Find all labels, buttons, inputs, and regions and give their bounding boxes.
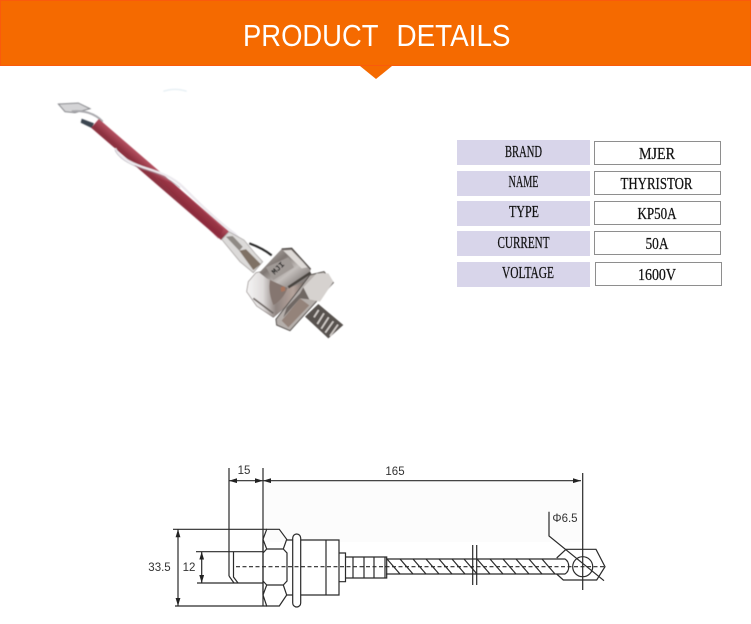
row: voltage: VOLTAGE: [502, 263, 554, 282]
hex nut: [276, 272, 333, 331]
stud thread: [229, 552, 238, 583]
break lines: [473, 545, 477, 585]
title: PRODUCT: [243, 19, 378, 53]
row: voltage: 1600V: [638, 265, 677, 284]
lug hole: [573, 557, 593, 577]
terminal lug: [58, 103, 90, 113]
faint reflection: [163, 89, 187, 91]
thread: [305, 304, 343, 338]
black wire: [249, 243, 272, 255]
cable hatching: [387, 559, 555, 574]
braided cable: [386, 559, 569, 574]
dimension labels: 15: [238, 465, 250, 477]
row: brand: BRAND: [505, 142, 542, 161]
drawing background tint: [264, 482, 582, 542]
glass seal: [222, 232, 263, 273]
dimension 33.5 arrow: [177, 529, 179, 606]
dimension labels: Φ6.5: [552, 513, 578, 525]
extension lines: [173, 468, 583, 606]
row: type: KP50A: [638, 204, 677, 223]
row: name: THYRISTOR: [620, 174, 693, 193]
row: current: 50A: [646, 234, 669, 253]
row: brand: [457, 140, 720, 165]
row: type: TYPE: [509, 202, 539, 221]
row: type: [457, 201, 720, 226]
row: name: NAME: [508, 172, 538, 191]
banner pointer: [360, 66, 392, 79]
ribbed stem: [346, 557, 387, 578]
dimension labels: 33.5: [148, 562, 171, 574]
ring lug: [557, 549, 605, 580]
header banner: [0, 0, 750, 79]
dimension labels: 165: [385, 466, 405, 478]
centre line: [236, 566, 606, 568]
dimension labels: [148, 465, 578, 574]
marking: MJI: [270, 260, 287, 277]
row: brand: MJER: [639, 144, 676, 163]
flange washer: [293, 534, 301, 607]
hole leader line: [549, 512, 604, 581]
dimension 12 arrow: [201, 552, 203, 583]
dimension 15 arrow: [229, 480, 263, 482]
row: voltage: [457, 262, 722, 287]
row: current: CURRENT: [498, 233, 550, 252]
upper collar: [259, 248, 311, 288]
row: name: [457, 171, 720, 196]
white wire: [115, 148, 253, 253]
red sleeve: [95, 123, 225, 236]
dimension drawing: [173, 468, 606, 607]
specification table: [457, 140, 722, 287]
title: DETAILS: [396, 19, 510, 53]
dimension labels: 12: [183, 562, 195, 574]
hex nut: [263, 529, 287, 606]
dimension 165 arrow: [263, 480, 581, 482]
body: [287, 540, 346, 595]
product photo: thyristor: [58, 89, 343, 338]
cup: [247, 265, 305, 317]
row: current: [457, 231, 720, 256]
